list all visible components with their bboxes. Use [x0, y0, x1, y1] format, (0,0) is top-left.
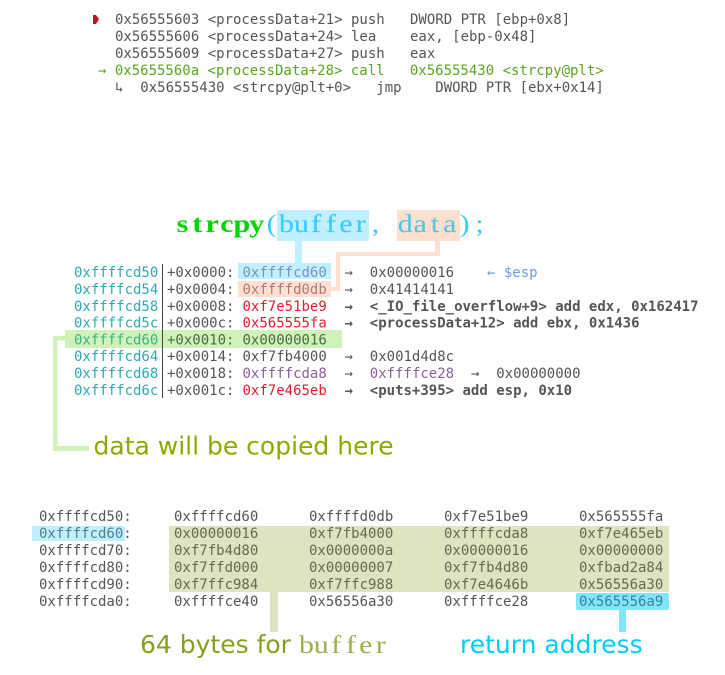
- icon: breakpoint marker: [93, 15, 99, 24]
- stack row 7: [74, 383, 572, 399]
- data highlight and connector: [238, 210, 460, 297]
- return address highlight: [576, 593, 669, 632]
- current instruction line: → 0x5655560a <processData+28> call 0x56555430 <strcpy@plt>: [98, 63, 604, 79]
- stack row 6: 0xffffcd68: [74, 366, 158, 382]
- disassembly line 3: 0x56555609 <processData+27> push eax: [115, 46, 435, 62]
- 64-byte buffer region: [169, 526, 669, 632]
- memory row 1: 0xf7fb4000: [309, 526, 393, 542]
- memory row 0: 0xffffcd50:: [39, 509, 132, 525]
- stack row 5: +0x0014:: [167, 349, 234, 365]
- stack row 3: 0x565555fa: [242, 316, 327, 332]
- memory row 3: 0xf7ffd000: [174, 560, 258, 576]
- memory row 0: 0x565555fa: [579, 509, 663, 525]
- stack row 2: 0xf7e51be9: [242, 299, 327, 315]
- stack row 4 highlighted: [74, 332, 327, 348]
- stack row 2: [74, 299, 699, 315]
- stack row 0: [74, 265, 538, 281]
- stack row 1: 0xffffcd54: [74, 282, 158, 298]
- stack row 3: [74, 316, 640, 332]
- memory row 5: 0xffffce28: [444, 594, 528, 610]
- memory row 1: 0xffffcd60: [39, 526, 123, 542]
- stack row 6: +0x0018:: [167, 366, 234, 382]
- disassembly line 1: 0x56555603 <processData+21> push DWORD PTR [ebp+0x8]: [115, 12, 570, 28]
- memory row 2: 0xffffcd70:: [39, 543, 132, 559]
- memory row 2: 0x00000016: [444, 543, 528, 559]
- stack row 5: [74, 349, 454, 365]
- stack row 0: +0x0000:: [167, 265, 234, 281]
- strcpy call heading: (: [267, 209, 277, 237]
- memory row 4: 0xf7e4646b: [444, 577, 528, 593]
- memory row 1: 0x00000016: [174, 526, 258, 542]
- stack row 7: 0xf7e465eb: [242, 383, 327, 399]
- memory row 0: 0xffffd0db: [309, 509, 393, 525]
- disassembly line 2: 0x56555606 <processData+24> lea eax, [ebp-0x48]: [115, 29, 536, 45]
- annotation: return address: return address: [460, 630, 643, 659]
- stack row 2: 0xffffcd58: [74, 299, 158, 315]
- stack row 6: [74, 366, 581, 382]
- stack row 4 highlighted: 0xffffcd60: [74, 332, 158, 348]
- stack row 4 highlighted: +0x0010:: [167, 332, 234, 348]
- memory row 0: 0xf7e51be9: [444, 509, 528, 525]
- stack dump: [74, 264, 699, 399]
- stack row 1: +0x0004:: [167, 282, 234, 298]
- stack row 0: → 0x00000016: [344, 265, 454, 281]
- stack row 1: 0xffffd0db: [242, 282, 327, 298]
- stack row 3: → <processData+12> add ebx, 0x1436: [344, 316, 640, 332]
- stack row 1: [74, 282, 454, 298]
- stack row 2: +0x0008:: [167, 299, 234, 315]
- strcpy call heading: strcpy: [177, 209, 264, 237]
- stack row 7: 0xffffcd6c: [74, 383, 158, 399]
- memory row 5: 0x565556a9: [579, 594, 663, 610]
- memory row 5: 0xffffcda0:: [39, 594, 132, 610]
- memory row 3: 0x00000007: [309, 560, 393, 576]
- stack row 3: +0x000c:: [167, 316, 234, 332]
- stack divider: [162, 264, 163, 398]
- memory row 0: 0xffffcd60: [174, 509, 258, 525]
- stack row 4 highlighted: 0x00000016: [242, 332, 327, 348]
- annotation: 64 bytes for buffer: [140, 630, 386, 659]
- memory row 5: 0x56556a30: [309, 594, 393, 610]
- jump target line: ↳ 0x56555430 <strcpy@plt+0> jmp DWORD PTR [ebx+0x14]: [115, 80, 604, 96]
- green highlight with connector: [53, 330, 342, 451]
- strcpy call heading: buffer: [279, 209, 366, 237]
- memory row 1: :: [123, 526, 132, 542]
- stack row 5: 0xf7fb4000: [242, 349, 327, 365]
- memory row 4: 0x56556a30: [579, 577, 663, 593]
- stack row 1: → 0x41414141: [344, 282, 454, 298]
- stack row 3: 0xffffcd5c: [74, 316, 158, 332]
- annotation: data will be copied here: data will be copied here: [94, 432, 394, 460]
- memory row 4: 0xffffcd90:: [39, 577, 132, 593]
- memory row 1: 0xffffcda8: [444, 526, 528, 542]
- memory row 4: 0xf7ffc988: [309, 577, 393, 593]
- stack row 2: → <_IO_file_overflow+9> add edx, 0x162417: [344, 299, 699, 315]
- memory row 3: 0xf7fb4d80: [444, 560, 528, 576]
- strcpy call heading: );: [460, 209, 484, 237]
- memory row 2: 0x0000000a: [309, 543, 393, 559]
- stack row 6: → 0xffffce28 → 0x00000000: [344, 366, 581, 382]
- memory row 2: 0x00000000: [579, 543, 663, 559]
- stack row 0: 0xffffcd50: [74, 265, 158, 281]
- memory row 5: 0xffffce40: [174, 594, 258, 610]
- stack row 6: 0xffffcda8: [242, 366, 327, 382]
- memory row 1: 0xf7e465eb: [579, 526, 663, 542]
- stack row 7: +0x001c:: [167, 383, 234, 399]
- strcpy call heading: data: [398, 209, 456, 237]
- memory row 4: 0xf7ffc984: [174, 577, 258, 593]
- memory row 3: 0xfbad2a84: [579, 560, 663, 576]
- stack row 7: → <puts+395> add esp, 0x10: [344, 383, 572, 399]
- memory dump: [39, 509, 663, 610]
- stack row 0: 0xffffcd60: [242, 265, 327, 281]
- annotation: 64 bytes for buffer: 64 bytes for: [140, 630, 292, 659]
- stack row 0: ← $esp: [487, 265, 538, 281]
- memory row 3: 0xffffcd80:: [39, 560, 132, 576]
- stack row 5: 0xffffcd64: [74, 349, 158, 365]
- buffer highlight and connector: [238, 210, 369, 279]
- stack row 5: → 0x001d4d8c: [344, 349, 454, 365]
- memory address highlight: [32, 526, 125, 541]
- memory row 2: 0xf7fb4d80: [174, 543, 258, 559]
- annotation: 64 bytes for buffer: buffer: [299, 630, 386, 658]
- disassembly listing: [93, 12, 604, 96]
- strcpy call heading: ,: [372, 209, 379, 237]
